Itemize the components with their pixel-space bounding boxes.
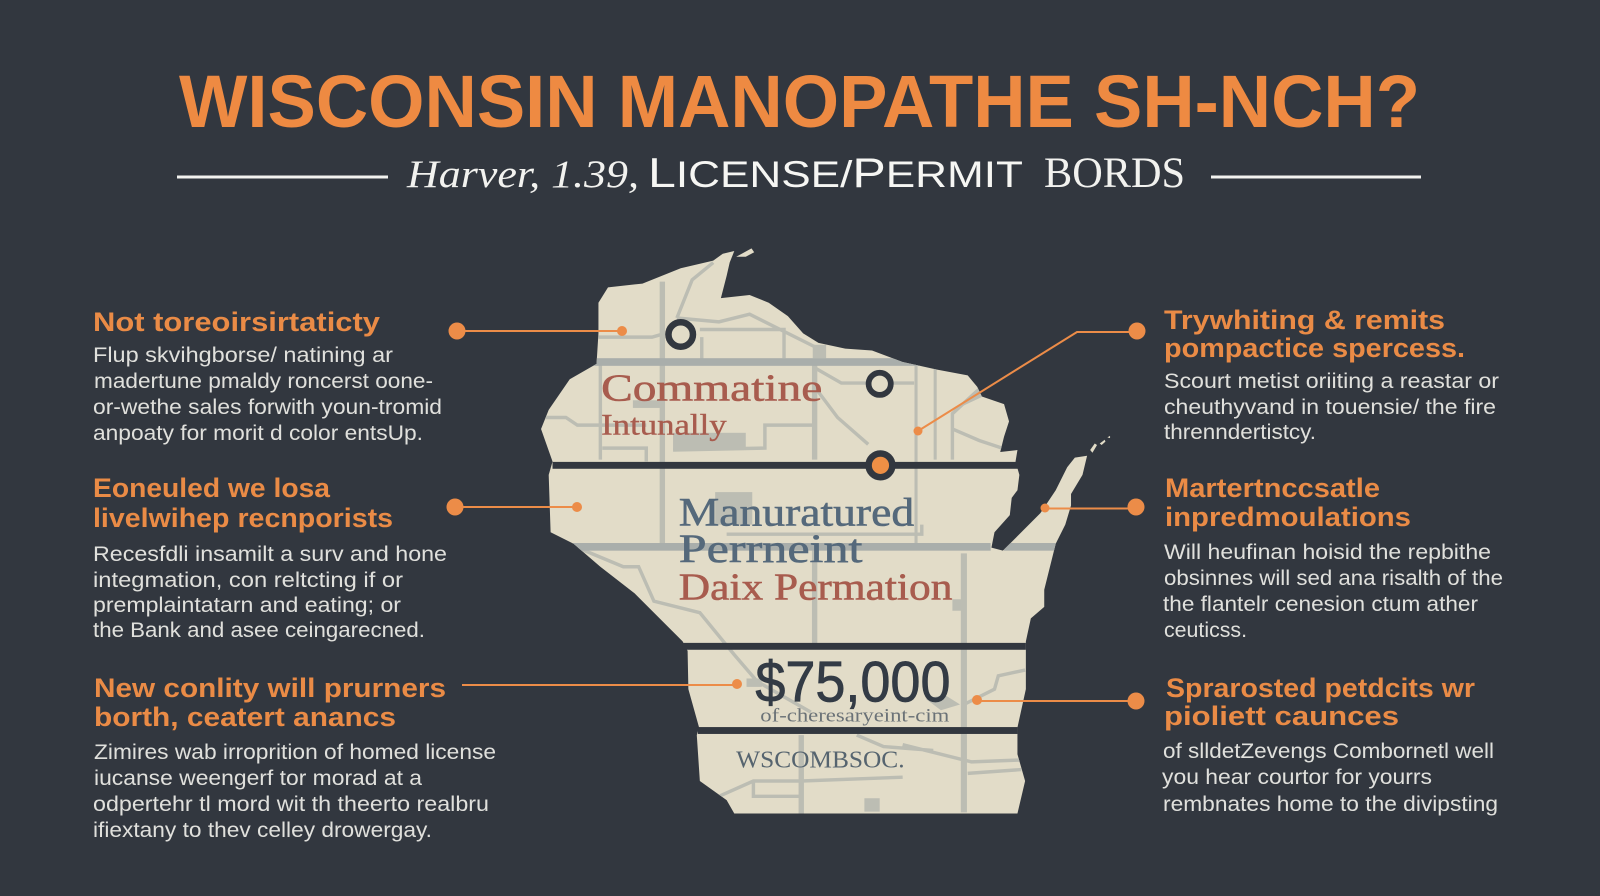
grey bands — [558, 358, 1058, 551]
body text: Scourt metist oriiting a reastar or — [1164, 370, 1499, 393]
body text: ifiextany to thev celley drowergay. — [93, 819, 432, 842]
heading — [94, 673, 446, 732]
panel: left item 2 — [93, 473, 447, 642]
subtitle with rules: Harver, 1.39, — [406, 153, 639, 196]
panel: left item 1 — [93, 307, 442, 445]
panel: right item 1 — [1164, 305, 1499, 444]
body text — [93, 543, 447, 642]
body text: integmation, con reltcting if or — [93, 569, 403, 592]
map label: Commatine: Commatine — [601, 367, 822, 409]
map label: WSCOMBSOC: WSCOMBSOC. — [736, 747, 905, 774]
body text: rembnates home to the divipsting — [1163, 793, 1498, 816]
dark divider bars — [553, 462, 1026, 734]
panel: right item 3 — [1162, 673, 1498, 816]
map label: Intunally: Intunally — [601, 410, 727, 442]
heading: Sprarosted petdcits wr — [1166, 673, 1476, 703]
body text: cheuthyvand in touensie/ the fire — [1164, 396, 1496, 419]
body text: odpertehr tl mord wit th theerto realbru — [93, 793, 489, 816]
subtitle with rules: BORDS — [1044, 150, 1185, 197]
heading — [1164, 673, 1476, 731]
body text: iucanse weengerf tor morad at a — [94, 767, 422, 790]
map label: Perrneint: Perrneint — [679, 526, 863, 571]
body text — [1163, 541, 1503, 642]
heading — [93, 473, 393, 533]
state silhouette — [541, 248, 1110, 814]
heading: borth, ceatert anancs — [94, 702, 396, 732]
connector: left 2 — [446, 498, 582, 516]
connector: left 1 — [448, 322, 627, 340]
connector: right 1 — [914, 322, 1146, 436]
body text: Zimires wab irroprition of homed license — [94, 741, 496, 764]
body text: Will heufinan hoisid the repbithe — [1164, 541, 1491, 564]
body text: premplaintatarn and eating; or — [93, 594, 401, 617]
heading — [1164, 305, 1465, 363]
heading: Trywhiting & remits — [1164, 305, 1445, 335]
map marker ring 1 — [668, 322, 693, 347]
panel: left item 3 — [93, 673, 496, 842]
body text: of slldetZevengs Combornetl well — [1163, 740, 1494, 763]
body text: Recesfdli insamilt a surv and hone — [93, 543, 447, 566]
heading: livelwihep recnporists — [93, 503, 393, 533]
panel: right item 2 — [1163, 473, 1503, 642]
heading: pioliett caunces — [1164, 701, 1399, 731]
body text: madertune pmaldy roncerst oone- — [94, 370, 433, 393]
connector: right 2 — [1040, 498, 1144, 516]
map of Wisconsin — [541, 248, 1110, 814]
heading: Martertnccsatle — [1165, 473, 1380, 503]
map marker ring 2 — [869, 373, 891, 395]
body text — [1164, 370, 1499, 444]
map marker ring orange — [869, 453, 892, 477]
body text: or-wethe sales forwith youn-tromid — [93, 396, 442, 419]
body text — [93, 741, 496, 842]
body text — [1162, 740, 1498, 816]
figure: $75,000: $75,000 — [755, 650, 950, 714]
body text: the Bank and asee ceingarecned. — [93, 619, 425, 642]
body text — [93, 344, 442, 445]
title: WISCONSIN MANOPATHE SH-NCH? — [179, 60, 1420, 143]
connector: right 3 — [972, 692, 1144, 710]
heading: Not toreoirsirtaticty — [93, 307, 380, 337]
body text: the flantelr cenesion ctum ather — [1163, 593, 1478, 616]
body text: Flup skvihgborse/ natining ar — [93, 344, 393, 367]
heading: Eoneuled we losa — [93, 473, 331, 503]
heading — [1165, 473, 1411, 532]
body text: you hear courtor for yourrs — [1162, 766, 1432, 789]
heading: pompactice spercess. — [1164, 333, 1465, 363]
heading: New conlity will prurners — [94, 673, 446, 703]
map label: Daix Permation: Daix Permation — [679, 566, 952, 608]
body text: ceuticss. — [1164, 619, 1247, 642]
body text: anpoaty for morit d color entsUp. — [93, 422, 423, 445]
body text: threnndertistcy. — [1164, 421, 1316, 444]
subtitle with rules — [177, 149, 1421, 197]
subtitle with rules: LICENSE/ PERMIT — [648, 149, 1023, 196]
heading: inpredmoulations — [1165, 502, 1411, 532]
body text: obsinnes will sed ana risalth of the — [1164, 567, 1503, 590]
map label: Manuratured: Manuratured — [679, 489, 914, 534]
figure caption: of-cheresaryeint-cim — [760, 706, 949, 727]
road network — [543, 263, 1025, 814]
connector: left 3 — [462, 679, 742, 689]
